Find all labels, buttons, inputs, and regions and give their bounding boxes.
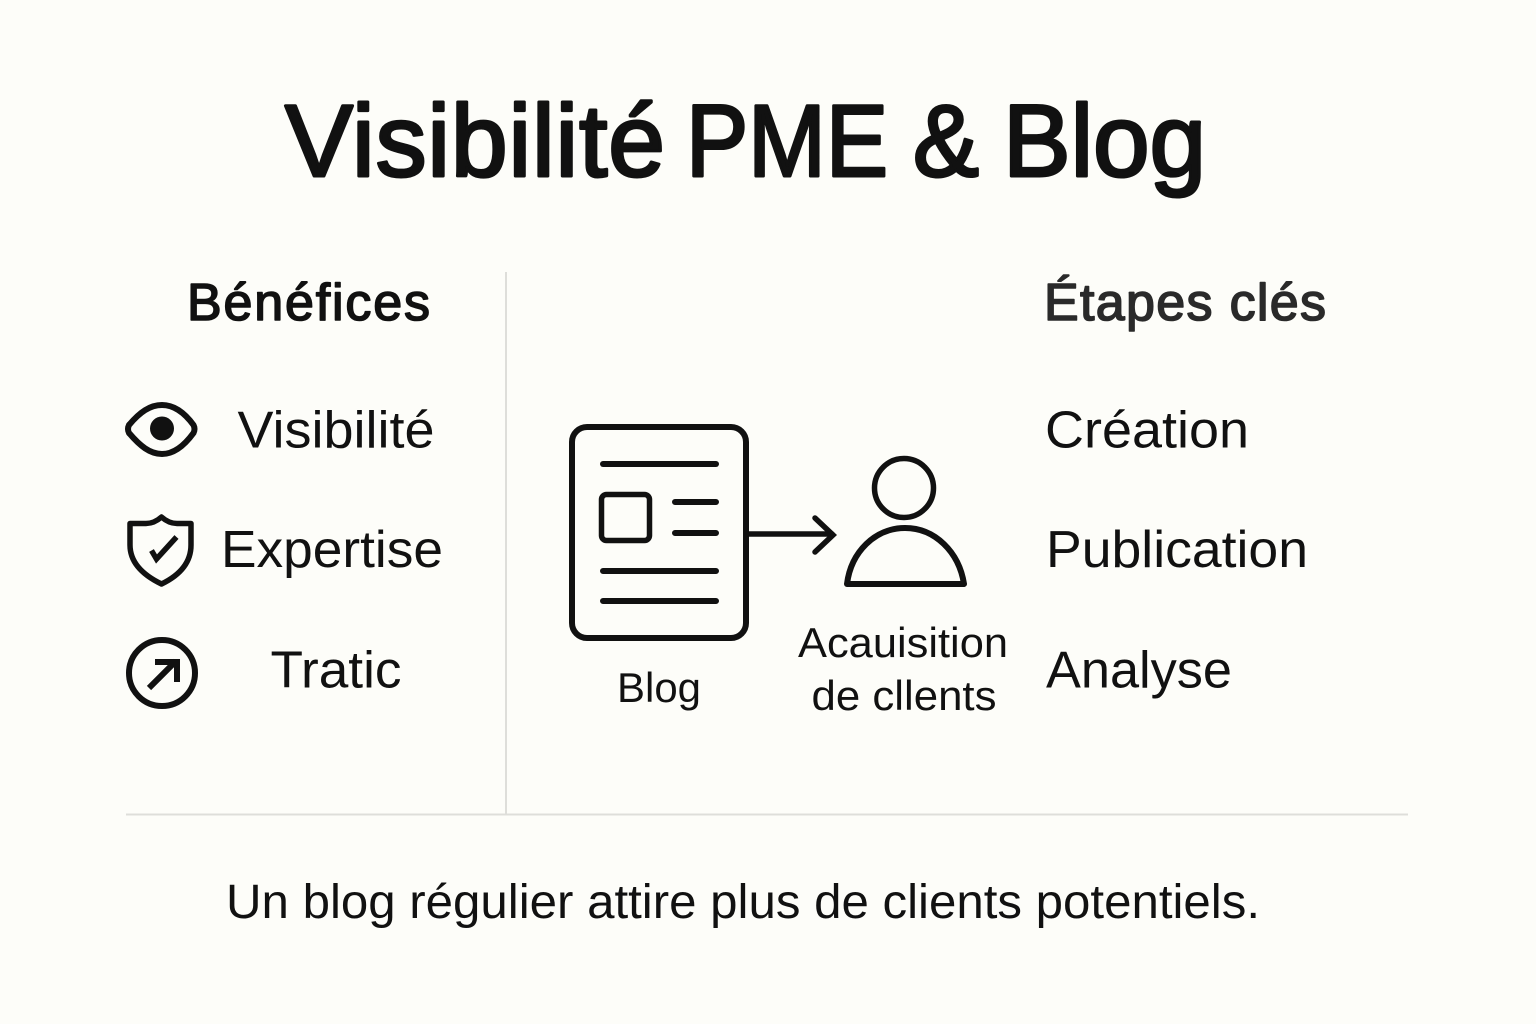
- icon: shield check: [130, 517, 191, 584]
- title: PME: [686, 84, 888, 198]
- diagram: blog to client acquisition: [572, 427, 1008, 719]
- title: Visibilité: [285, 84, 665, 198]
- icon: traffic arrow: [129, 640, 195, 706]
- step: Création: Création: [1045, 402, 1249, 460]
- heading: Étapes clés: Étapes clés: [1044, 274, 1326, 332]
- title: Blog: [1003, 84, 1206, 198]
- label: Blog: Blog: [617, 664, 701, 711]
- label: Acquisition de clients: [798, 619, 1008, 719]
- step: Analyse: Analyse: [1046, 642, 1232, 700]
- icon: eye: [128, 405, 194, 454]
- label: Acquisition de clients: Acauisition: [798, 619, 1008, 666]
- footer statement: Un blog régulier attire plus de clients potentiels.: [226, 876, 1260, 929]
- label: Expertise: Expertise: [221, 521, 443, 579]
- title: &: [913, 84, 979, 198]
- arrow: [749, 518, 833, 552]
- icon: blog document: [572, 427, 746, 638]
- label: Tratic: Tratic: [270, 642, 402, 700]
- label: Visibilité: Visibilité: [238, 402, 434, 460]
- icon: person: [847, 458, 964, 584]
- title: [285, 84, 1206, 198]
- label: Acquisition de clients: de cllents: [812, 672, 996, 719]
- step: Publication: Publication: [1046, 521, 1308, 579]
- heading: Bénéfices: Bénéfices: [187, 274, 430, 332]
